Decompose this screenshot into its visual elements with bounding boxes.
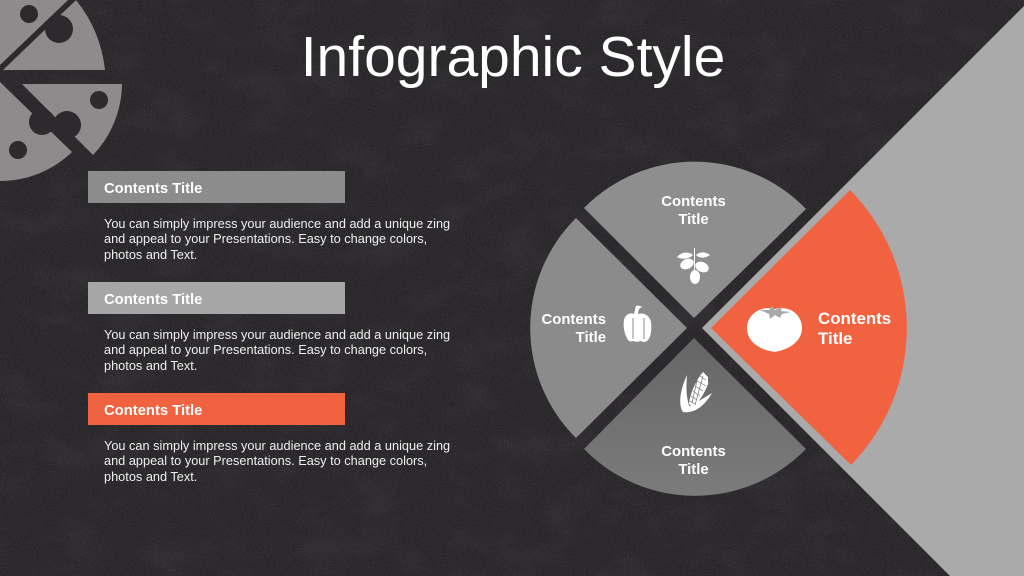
label: top wedge: Title: [678, 212, 709, 228]
icon: tomato: [747, 306, 802, 352]
text block: item 3: [104, 438, 450, 484]
panel: item 2 heading: Contents Title: [104, 292, 202, 308]
label: right wedge: [818, 309, 891, 348]
label: left wedge: Contents: [541, 312, 606, 328]
label: top wedge: [661, 194, 726, 228]
panel: item 3 heading: Contents Title: [104, 403, 202, 419]
wedge: top: [584, 162, 806, 318]
wedge: bottom: [584, 338, 806, 496]
label: bottom wedge: [661, 444, 726, 478]
text block: item 2: You can simply impress your audience and add a unique zing: [104, 327, 450, 342]
label: bottom wedge: Contents: [661, 444, 726, 460]
label: left wedge: Title: [576, 330, 606, 346]
icon: bell pepper: [624, 306, 651, 342]
text block: item 3: and appeal to your Presentations. Easy to change colors,: [104, 453, 427, 468]
label: right wedge: Contents: [818, 309, 891, 328]
label: bottom wedge: Title: [678, 462, 709, 478]
wedge: left: [530, 218, 687, 438]
text block: item 1: [104, 216, 450, 262]
text block: item 2: photos and Text.: [104, 358, 197, 373]
label: left wedge: [541, 312, 606, 346]
text block: item 1: photos and Text.: [104, 247, 197, 262]
panel: item 3 heading: [88, 393, 345, 425]
icon: pizza slices: [0, 0, 122, 181]
panel: item 2 heading: [88, 282, 345, 314]
icon: corn cob: [680, 372, 712, 412]
label: right wedge: Title: [818, 329, 852, 348]
label: top wedge: Contents: [661, 194, 726, 210]
panel: item 1 heading: Contents Title: [104, 181, 202, 197]
text block: item 1: and appeal to your Presentations. Easy to change colors,: [104, 231, 427, 246]
icon: olive branch: [677, 248, 710, 284]
title: Infographic Style: [301, 25, 725, 89]
text block: item 3: photos and Text.: [104, 469, 197, 484]
panel: item 1 heading: [88, 171, 345, 203]
text block: item 2: [104, 327, 450, 373]
wedge: right highlighted: [711, 190, 907, 465]
text block: item 1: You can simply impress your audience and add a unique zing: [104, 216, 450, 231]
text block: item 3: You can simply impress your audience and add a unique zing: [104, 438, 450, 453]
text block: item 2: and appeal to your Presentations. Easy to change colors,: [104, 342, 427, 357]
